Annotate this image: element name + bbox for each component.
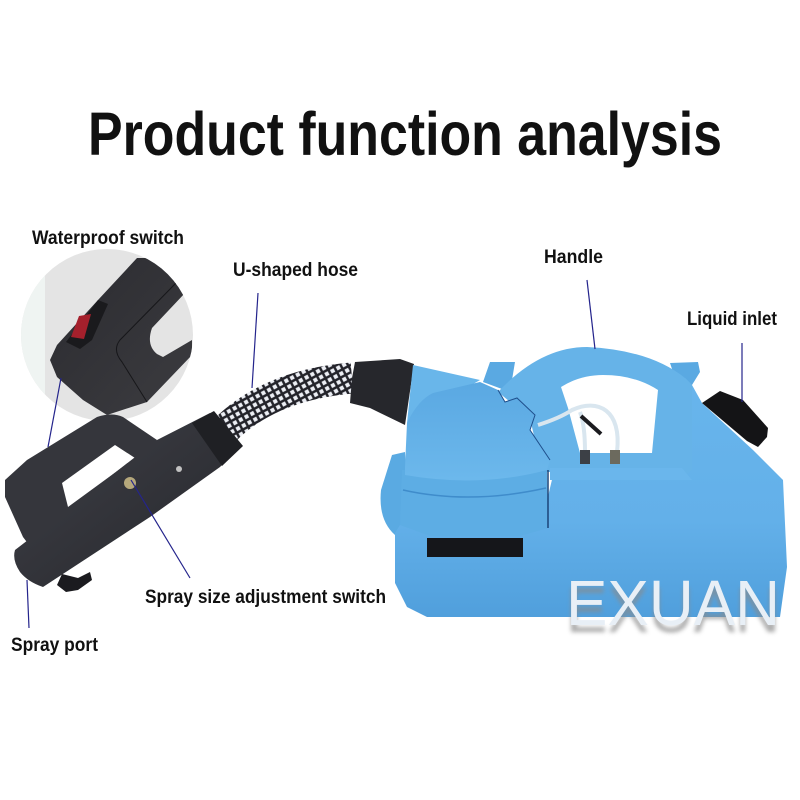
lower housing: [400, 470, 548, 536]
handle opening: [561, 375, 658, 453]
callout: waterproof switch: Waterproof switch: [32, 228, 184, 249]
mount tabs: [483, 362, 700, 392]
callout: waterproof switch: [32, 228, 184, 447]
callout: spray port: [11, 580, 99, 656]
dome: [405, 382, 550, 480]
black connector: [350, 359, 414, 425]
callout: liquid inlet: Liquid inlet: [687, 309, 778, 330]
callout: handle: Handle: [544, 247, 603, 268]
fittings: [580, 450, 590, 464]
inset: waterproof switch close-up: [20, 249, 194, 421]
blue sprayer: [381, 347, 787, 617]
callout: spray size adjustment switch: Spray size adjustment switch: [145, 587, 386, 608]
watermark: EXUAN: EXUAN: [566, 567, 780, 639]
handle: [498, 347, 692, 480]
velcro strap: [427, 538, 523, 557]
tubes: [538, 406, 618, 452]
lower tank step: [550, 468, 692, 480]
callout: handle: [544, 247, 603, 349]
callout: spray size adjustment switch: [131, 480, 386, 608]
inlet cap: [702, 391, 768, 447]
callout: U-shaped hose: U-shaped hose: [233, 260, 358, 281]
callout: liquid inlet: [687, 309, 778, 402]
callout: spray port: Spray port: [11, 635, 99, 656]
hose: [225, 378, 352, 430]
tank body and base: [395, 378, 787, 617]
neck: [407, 365, 480, 423]
black wand and grip: [5, 411, 243, 592]
callout: U-shaped hose: [233, 260, 358, 388]
watermark: EXUAN: EXUAN: [566, 574, 780, 646]
rear shroud: [381, 452, 410, 535]
